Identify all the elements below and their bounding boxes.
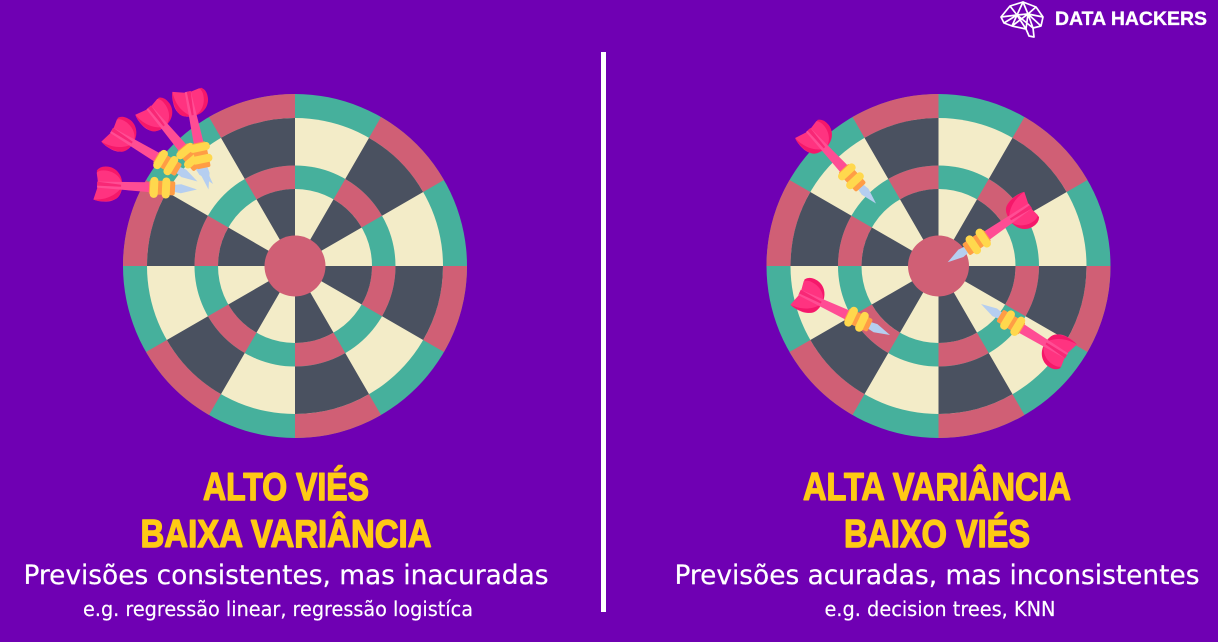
examples right: e.g. decision trees, KNN — [824, 597, 1056, 621]
divider — [601, 52, 606, 612]
panel: alta variância, baixo viés — [674, 94, 1200, 621]
examples left: e.g. regressão linear, regressão logistíca — [83, 597, 473, 621]
dartboard right — [766, 94, 1110, 438]
heading: baixo viés: BAIXO VIÉS — [844, 512, 1030, 556]
heading: alta variância: ALTA VARIÂNCIA — [803, 465, 1071, 509]
description left: Previsões consistentes, mas inacuradas — [24, 560, 548, 591]
heading: baixa variância: BAIXA VARIÂNCIA — [140, 512, 432, 556]
dartboard left — [123, 94, 467, 438]
darts scattered — [790, 115, 1078, 373]
panel: alto viés, baixa variância — [24, 85, 548, 621]
wordmark: DATA HACKERS — [1055, 9, 1207, 30]
icon: brain network — [1001, 2, 1043, 37]
description right: Previsões acuradas, mas inconsistentes — [674, 560, 1200, 591]
dart cluster top left — [93, 85, 227, 206]
logo: data hackers — [1001, 2, 1207, 37]
heading: alto viés: ALTO VIÉS — [203, 465, 369, 509]
